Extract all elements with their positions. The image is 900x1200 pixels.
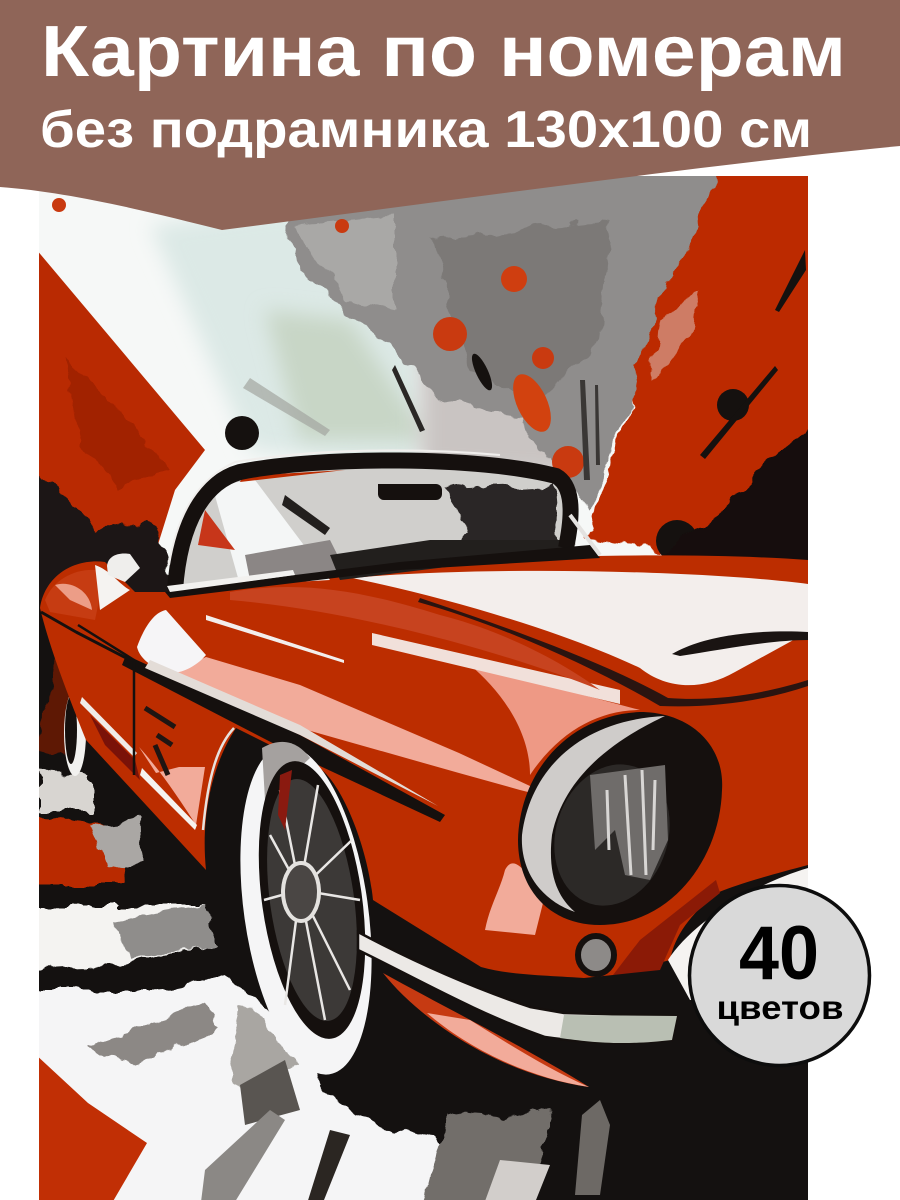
road and ground <box>10 600 808 1200</box>
badge: 40 colours <box>690 886 870 1066</box>
white hood <box>352 571 808 685</box>
front wheel <box>240 742 372 1075</box>
painting: red retro convertible <box>39 176 808 1200</box>
header banner <box>0 0 900 230</box>
paint splashes <box>52 198 830 575</box>
side mirror <box>107 554 140 582</box>
title: Картина по номерам <box>41 12 846 92</box>
badge label: цветов <box>716 989 844 1026</box>
subtitle: без подрамника 130х100 см <box>40 101 812 159</box>
rear wheel <box>64 690 86 776</box>
body reflections <box>178 657 530 792</box>
car body <box>40 555 808 978</box>
fog lamp <box>578 936 614 974</box>
headlight <box>518 712 722 925</box>
painting background <box>39 176 808 600</box>
badge number: 40 <box>739 911 819 996</box>
chrome bumper <box>358 868 808 1087</box>
windshield <box>107 450 600 598</box>
